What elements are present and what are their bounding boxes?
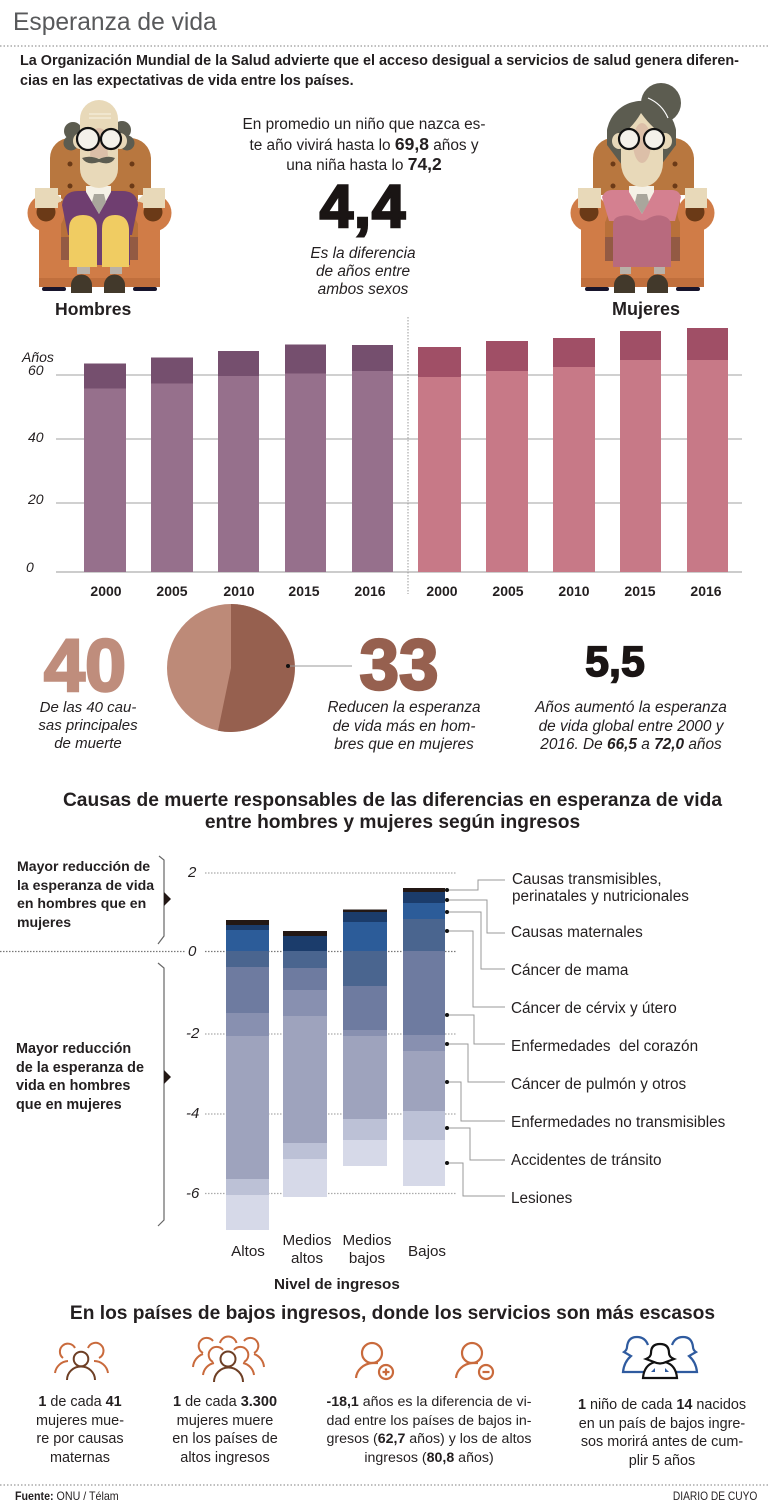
year labels: 2016 (354, 583, 386, 599)
text: top bracket: Mayor reducción de (17, 858, 150, 874)
text: stat 2: altos ingresos (180, 1450, 270, 1466)
year labels: 2005 (156, 583, 188, 599)
legend labels: perinatales y nutricionales (512, 888, 689, 905)
text: global increase: Años aumentó la esperanza (535, 699, 727, 716)
bar chart: grid and axis (56, 317, 742, 594)
text: difference caption: de años entre (316, 263, 410, 280)
icon: large group of women (193, 1337, 264, 1382)
year labels: 2015 (288, 583, 320, 599)
text: 33 causes: de vida más en hom- (333, 718, 475, 734)
label: Mujeres: Mujeres (612, 299, 680, 319)
text: 33 causes: Reducen la esperanza (327, 699, 481, 716)
text: bottom bracket: vida en hombres (16, 1078, 130, 1094)
text: stat 3 (326, 1394, 532, 1466)
heading: causes: Causas de muerte responsables de las diferencias en esperanza de vida (63, 790, 722, 811)
icon: woman in armchair (570, 83, 714, 293)
legend labels: Enfermedades no transmisibles (511, 1114, 725, 1131)
legend labels (511, 871, 725, 1207)
text: stat 1: re por causas (36, 1431, 124, 1447)
text: average life expectancy: una niña hasta lo 74,2 (286, 154, 442, 174)
y axis labels (186, 864, 200, 1202)
legend labels: Cáncer de pulmón y otros (511, 1076, 686, 1093)
icon: person plus (356, 1343, 393, 1379)
big number: 4,4: 4,4 (320, 173, 406, 240)
text: 40 causes: De las 40 cau- (40, 699, 136, 716)
text: 33 causes (327, 699, 481, 753)
big number: 40: 40 (44, 624, 126, 707)
legend labels: Causas maternales (511, 924, 643, 941)
intro text: La Organización Mundial de la Salud advierte que el acceso desigual a servicios de salud genera diferen- (20, 53, 739, 69)
year labels: 2000 (426, 583, 458, 599)
icon: children group (623, 1337, 697, 1378)
axis labels: 0 (26, 559, 34, 575)
x axis labels: Altos (231, 1243, 265, 1260)
x axis labels (231, 1232, 446, 1267)
big number: 33: 33 (360, 626, 438, 705)
x axis labels: Bajos (408, 1243, 446, 1260)
text: top bracket: la esperanza de vida (17, 876, 154, 892)
legend labels: Cáncer de mama (511, 962, 628, 979)
text: top bracket: mujeres (17, 914, 71, 930)
text: average life expectancy: te año vivirá hasta lo 69,8 años y (249, 134, 479, 154)
text: top bracket (17, 858, 154, 930)
text: average life expectancy (242, 116, 486, 174)
text: 40 causes (38, 699, 138, 752)
big number: 5,5: 5,5 (585, 638, 645, 686)
credit: DIARIO DE CUYO (673, 1489, 757, 1503)
text: 40 causes: de muerte (54, 735, 122, 752)
heading: low income: En los países de bajos ingresos, donde los servicios son más escasos (70, 1303, 715, 1324)
year labels: 2015 (624, 583, 656, 599)
x axis labels: Medios (283, 1232, 331, 1249)
text: global increase (534, 699, 727, 753)
text: bottom bracket: que en mujeres (16, 1096, 122, 1112)
legend labels: Accidentes de tránsito (511, 1152, 662, 1169)
text: bottom bracket: de la esperanza de (16, 1060, 144, 1076)
pie chart (167, 604, 352, 732)
text: global increase: 2016. De 66,5 a 72,0 años (540, 736, 722, 753)
text: global increase: de vida global entre 2000 y (539, 718, 723, 734)
text: stat 2 (172, 1394, 278, 1466)
legend labels: Lesiones (511, 1190, 572, 1207)
year labels (90, 583, 722, 599)
y axis labels: -4 (186, 1105, 199, 1122)
icon: person minus (456, 1343, 493, 1379)
y axis labels: -2 (186, 1025, 199, 1042)
stacked bar: Medios altos (283, 931, 327, 1197)
text: stat 1 (36, 1394, 124, 1466)
icon: group of three women (55, 1343, 108, 1380)
y axis labels: -6 (186, 1185, 199, 1202)
text: stat 4: 1 niño de cada 14 nacidos (578, 1397, 746, 1413)
bar chart: men (84, 344, 393, 572)
legend labels: Causas transmisibles, (512, 871, 662, 888)
bracket: top (158, 856, 171, 944)
year labels: 2010 (223, 583, 255, 599)
text: bottom bracket (16, 1041, 144, 1112)
stacked bar: Medios bajos (343, 910, 387, 1166)
text: stat 4: plir 5 años (629, 1452, 695, 1468)
text: stat 3: ingresos (80,8 años) (364, 1450, 494, 1466)
x axis labels: Medios (343, 1232, 391, 1249)
bracket: bottom (158, 963, 171, 1226)
text: stat 2: 1 de cada 3.300 (173, 1394, 277, 1410)
text: stat 4: sos morirá antes de cum- (581, 1434, 743, 1450)
axis labels (21, 349, 54, 575)
intro text: cias en las expectativas de vida entre los países. (20, 73, 354, 89)
stacked bar chart: grid (0, 873, 457, 1194)
text: average life expectancy: En promedio un niño que nazca es- (242, 116, 486, 133)
axis title: income level: Nivel de ingresos (274, 1276, 400, 1293)
label: Hombres: Hombres (55, 299, 131, 319)
legend labels: Enfermedades del corazón (511, 1038, 698, 1055)
text: stat 1: maternas (50, 1450, 110, 1466)
source: Fuente: ONU / Télam (15, 1489, 119, 1503)
title: Esperanza de vida (13, 9, 217, 36)
axis labels: 20 (28, 491, 44, 507)
year labels: 2005 (492, 583, 524, 599)
text: stat 3: dad entre los países de bajos in- (326, 1412, 532, 1428)
leader lines (445, 880, 505, 1196)
stacked bar: Altos (226, 920, 269, 1230)
axis labels: 60 (28, 362, 44, 378)
year labels: 2016 (690, 583, 722, 599)
icon: man in armchair (28, 100, 172, 293)
text: stat 4: en un país de bajos ingre- (579, 1416, 745, 1432)
heading: causes (63, 790, 722, 833)
text: stat 1: mujeres mue- (36, 1412, 124, 1428)
text: top bracket: en hombres que en (17, 895, 146, 911)
text: stat 3: -18,1 años es la diferencia de vi- (326, 1394, 532, 1410)
year labels: 2010 (558, 583, 590, 599)
text: 40 causes: sas principales (38, 717, 138, 734)
text: stat 1: 1 de cada 41 (38, 1394, 122, 1410)
intro text (20, 53, 739, 89)
x axis labels: altos (291, 1250, 323, 1267)
legend labels: Cáncer de cérvix y útero (511, 1000, 677, 1017)
text: difference caption (310, 245, 416, 298)
x axis labels: bajos (349, 1250, 385, 1267)
text: stat 2: en los países de (172, 1431, 278, 1447)
text: stat 2: mujeres muere (177, 1412, 273, 1428)
bar chart: women (418, 328, 728, 572)
text: stat 3: gresos (62,7 años) y los de altos (326, 1431, 532, 1447)
text: bottom bracket: Mayor reducción (16, 1041, 131, 1057)
axis labels: Años (22, 349, 54, 365)
y axis labels: 2 (188, 864, 196, 881)
y axis labels: 0 (188, 943, 196, 960)
year labels: 2000 (90, 583, 122, 599)
text: difference caption: Es la diferencia (310, 245, 416, 262)
text: 33 causes: bres que en mujeres (334, 736, 474, 753)
text: stat 4 (578, 1397, 746, 1468)
axis labels: 40 (28, 429, 44, 445)
stacked bar: Bajos (403, 888, 445, 1186)
text: difference caption: ambos sexos (318, 281, 408, 298)
heading: causes: entre hombres y mujeres según ingresos (205, 812, 580, 833)
